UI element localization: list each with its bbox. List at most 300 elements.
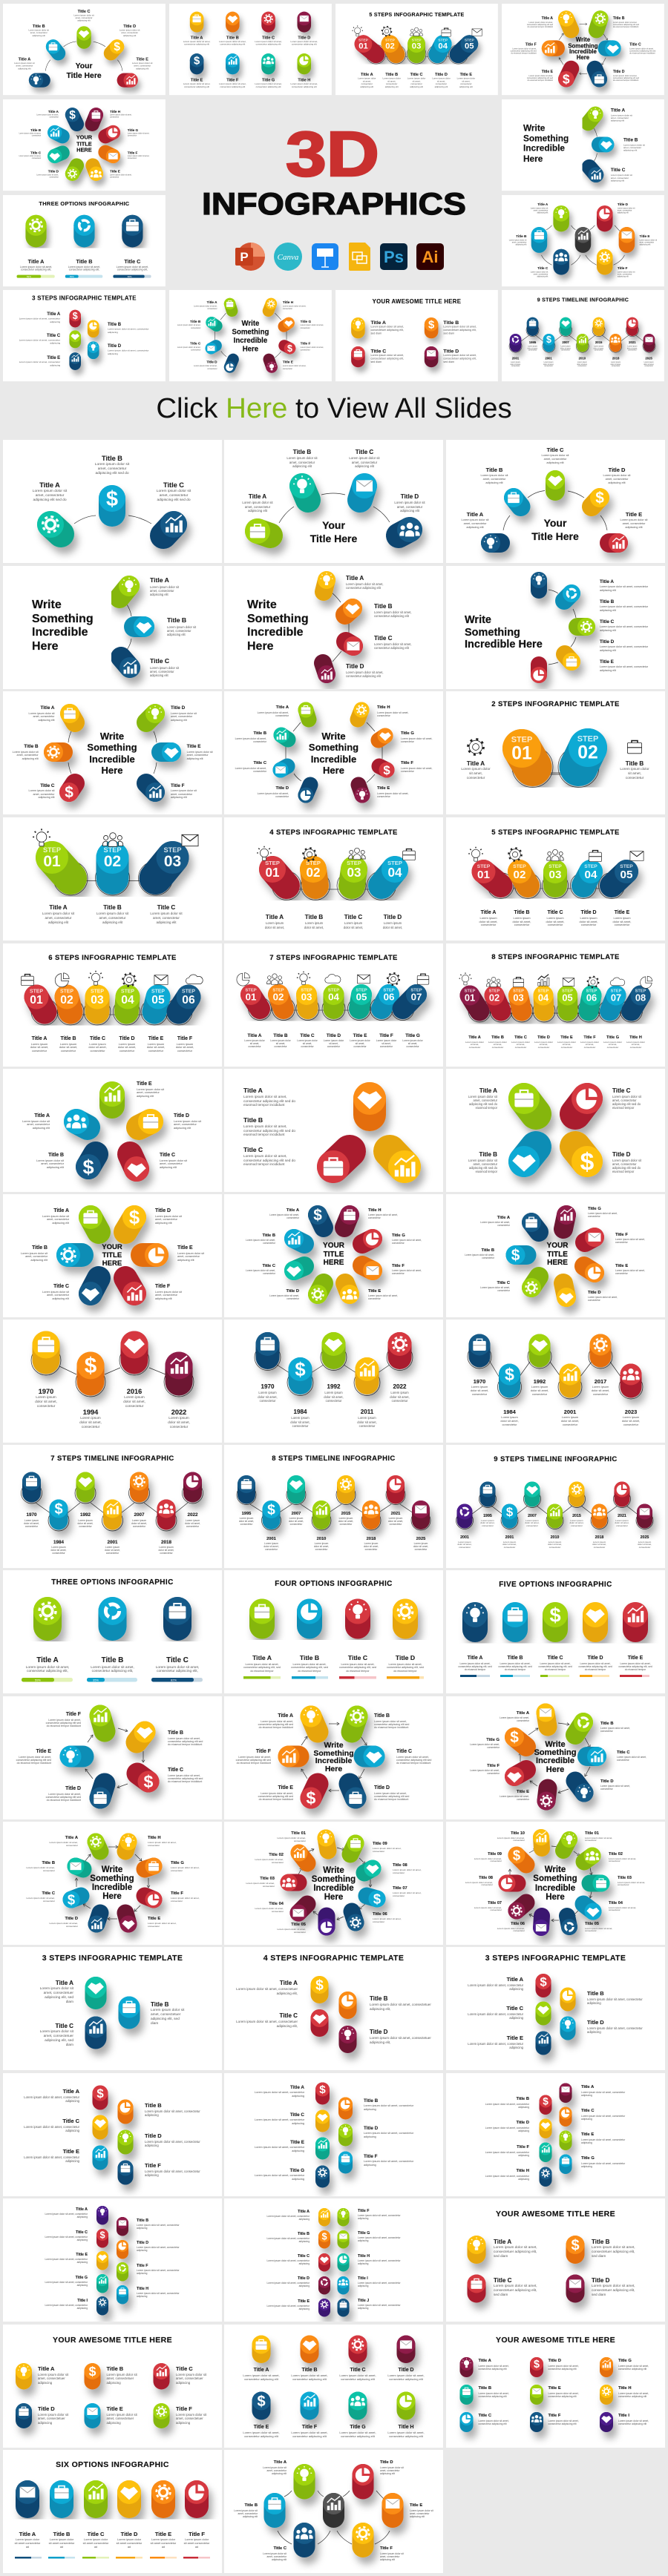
text: Title G xyxy=(618,2359,655,2371)
big title xyxy=(465,614,543,650)
pill: pie xyxy=(531,665,547,683)
pill: gear xyxy=(600,2385,613,2398)
text: Title D: Title D xyxy=(399,2368,413,2373)
pill: cycle xyxy=(98,1597,126,1627)
text: Title D xyxy=(588,1291,623,1302)
text: Title E: Lorem ipsum dolor sit amet, consectetur adipiscing elit xyxy=(548,2392,579,2398)
pill: cycle xyxy=(561,1916,577,1935)
text: Title C xyxy=(263,2254,310,2265)
text: Title A: Title A xyxy=(53,1208,69,1213)
bars xyxy=(460,1675,649,1677)
text: Title F: Lorem ipsum dolor sit amet, consectetur adipiscing elit xyxy=(291,2431,328,2438)
text: 2001 xyxy=(456,1535,474,1549)
panel: write something four pills xyxy=(224,566,443,688)
pill: pie xyxy=(572,1083,603,1114)
text: Title 08: Title 08 xyxy=(393,1863,407,1868)
text: Title A: Lorem ipsum dolor sit amet, consectetur adipiscing elit xyxy=(478,2365,509,2371)
text: 1984: 1984 xyxy=(503,1409,516,1415)
pill: dollar xyxy=(263,1501,281,1521)
thumbnail: eight pill grid: Title C xyxy=(262,35,275,40)
text: Title E: Lorem ipsum dolor sit amet, consectetur xyxy=(368,1294,398,1300)
text: Title F: Title F xyxy=(583,1035,596,1040)
text: 1970 xyxy=(22,1512,41,1528)
icon: pie outline xyxy=(55,973,69,987)
text: 2007: Lorem ipsum dolor sit amet, consectetur xyxy=(289,1517,304,1526)
pill: chart xyxy=(278,1746,300,1767)
pill: briefcase xyxy=(119,1997,140,2018)
text: Title A xyxy=(478,2359,515,2371)
icon: gear outline xyxy=(387,973,399,985)
text: Title E: Lorem ipsum dolor sit amet, consectetur adipiscing xyxy=(255,2146,304,2152)
text: Title A: Lorem ipsum dolor sit amet, consectetur adipiscing elit sed do eiusmod tempor xyxy=(468,1095,497,1110)
text: Title C: Title C xyxy=(547,447,563,453)
text: Title 06 xyxy=(373,1912,408,1924)
text: 2001 xyxy=(262,1537,281,1552)
text: Title B: Title B xyxy=(486,467,502,473)
text: Title A xyxy=(465,1035,484,1050)
icon: bulb outline xyxy=(297,972,310,985)
center title: Write xyxy=(323,1866,344,1875)
text: Title A xyxy=(600,579,648,592)
thumbnail: write something three pills: Title B xyxy=(623,137,638,142)
pill: pie xyxy=(297,1599,322,1626)
text: Title C xyxy=(150,657,180,677)
text: Title 01 xyxy=(270,1831,306,1843)
text: Title D: Lorem ipsum dolor sit amet, consectetur xyxy=(269,1294,299,1300)
text: Title A: Lorem ipsum dolor sit amet, consectetur adipiscing elit xyxy=(346,582,384,590)
thumbnail: your title here radial: Lorem ipsum dolor sit amet, consectetur xyxy=(110,174,132,178)
text: Title C: Lorem ipsum dolor sit amet, consectetur adipiscing elit xyxy=(29,789,55,799)
text: Title A xyxy=(477,909,500,927)
text: 2001: Lorem ipsum dolor sit amet, consectetur xyxy=(458,1541,471,1549)
panel: 5 steps xyxy=(446,817,665,941)
thumbnail: your title here: Title B xyxy=(33,24,45,28)
pill: step 02: STEP xyxy=(577,735,598,744)
text: Title C xyxy=(40,1283,69,1301)
text: 2025: 2025 xyxy=(416,1537,425,1541)
thumbnail: write something eight pills: Lorem ipsum dolor sit amet, consectetur xyxy=(283,305,306,309)
pill: chart xyxy=(536,2031,551,2047)
text: Title B: Lorem ipsum dolor sit amet, consectetur adipiscing xyxy=(587,1997,643,2005)
text: Title A: Lorem ipsum dolor sit amet, consectetur adipiscing elit xyxy=(150,585,179,596)
thumbnail: 3 steps five pills: Title C xyxy=(47,332,60,337)
text: Title D xyxy=(42,1917,78,1928)
pill: handshake xyxy=(508,1146,540,1177)
text: Title E xyxy=(610,909,634,927)
pill: chart xyxy=(84,2480,108,2506)
text: Title A: Lorem ipsum dolor sit amet, consectetur adipiscing elit, xyxy=(26,1666,69,1673)
icon: briefcase outline xyxy=(417,974,429,984)
text: Title B: Lorem ipsum dolor sit amet, consectetur adipiscing elit xyxy=(13,751,39,760)
text: Title H: Title H xyxy=(629,1035,642,1040)
text: Title D: Lorem ipsum dolor sit amet, consectetur adipiscing elit xyxy=(380,2466,404,2475)
text: Title D: Lorem ipsum dolor sit amet, consectetuer adipiscing elit, xyxy=(370,2036,431,2044)
pill: step 03: 03 xyxy=(91,994,104,1007)
text: Title C: Title C xyxy=(600,619,614,625)
text: Title A xyxy=(150,576,180,596)
text: Title C xyxy=(231,761,266,773)
text: Title D xyxy=(534,1035,553,1050)
text: Title D: Lorem ipsum dolor sit amet, xyxy=(383,921,402,929)
text: Title D: Title D xyxy=(65,1917,78,1921)
center title: Incredible xyxy=(311,754,356,764)
panel: three large pills xyxy=(224,1069,443,1191)
text: Title D xyxy=(38,2405,71,2425)
pill: step 01 xyxy=(472,860,500,886)
pill: bulb xyxy=(355,785,370,803)
pill: chart xyxy=(96,2274,108,2287)
text: Title F: Lorem ipsum dolor sit amet, consectetur adipiscing elit sed do eiusmod tempor incididunt xyxy=(236,1756,271,1765)
text: Title H: Title H xyxy=(137,2287,148,2291)
text: Title C: Title C xyxy=(497,1281,510,1285)
text: Title F: Lorem ipsum dolor sit amet, consectetur xyxy=(392,1269,422,1275)
thumbnail: your title here: Lorem ipsum dolor sit amet, consectetur adipiscing elit xyxy=(132,62,152,70)
pill: step 03: 03 xyxy=(513,992,524,1003)
text: Title D: Title D xyxy=(364,2126,378,2131)
text: Title 06: Lorem ipsum dolor sit amet, consectetur xyxy=(497,1927,525,1932)
pill: briefcase xyxy=(468,2274,485,2293)
panel: your title seven petals xyxy=(446,1194,665,1317)
text: 2001 xyxy=(103,1540,122,1555)
pill: handshake xyxy=(310,2009,328,2028)
pill: mail xyxy=(67,1857,85,1875)
pill: briefcase xyxy=(508,1083,540,1114)
pill: chart xyxy=(273,727,289,743)
text: Title E: Title E xyxy=(63,2148,79,2155)
pill: mail xyxy=(85,2403,101,2420)
text: Title B xyxy=(240,1233,275,1245)
text: Title D: Title D xyxy=(119,1036,134,1041)
big title: Something xyxy=(32,613,94,625)
heading: 3 STEPS INFOGRAPHIC TEMPLATE xyxy=(42,1954,183,1963)
pill: chart xyxy=(315,2138,330,2152)
text: Title F xyxy=(401,761,436,773)
text: Title E: Title E xyxy=(377,786,390,791)
pill: mail xyxy=(536,1703,555,1727)
thumbnail: your title here: Title C xyxy=(78,9,90,13)
text: Title A: Title A xyxy=(298,2210,310,2214)
text: Title F xyxy=(176,2405,209,2425)
text: Title A: Lorem ipsum dolor sit amet, consectetur adipiscing elit sed do eiusmod tempor incididunt xyxy=(243,1096,295,1107)
pill: step 05 xyxy=(557,985,577,1011)
text: Title 04: Lorem ipsum dolor sit amet, consectetur xyxy=(609,1906,636,1911)
heading: 4 STEPS INFOGRAPHIC TEMPLATE xyxy=(269,829,398,837)
thumbnail: three options: THREE OPTIONS INFOGRAPHIC xyxy=(39,201,129,207)
thumbnail: 9 steps timeline: 2018 xyxy=(612,357,619,360)
heading: YOUR AWESOME TITLE HERE xyxy=(53,2336,172,2345)
text: 2022: Lorem ipsum dolor sit amet, consectetur xyxy=(390,1391,410,1403)
text: Title 07 xyxy=(393,1886,428,1898)
text: Title D: Title D xyxy=(401,493,419,500)
center title xyxy=(511,1741,600,1774)
text: 2017: 2017 xyxy=(595,1378,606,1385)
text: Title F: Title F xyxy=(171,1891,183,1896)
text: Title D: Lorem ipsum dolor sit amet, consectetur adipiscing elit sed do eiusmod tempor incididunt xyxy=(374,1792,409,1801)
center title: HERE xyxy=(102,1259,122,1267)
pill: dollar xyxy=(572,1146,603,1177)
text: Title C xyxy=(511,1035,530,1050)
text: Title E: Lorem ipsum dolor sit amet, consectetur xyxy=(612,916,632,926)
text: Title F: Lorem ipsum dolor sit amet, consectetur xyxy=(171,1897,200,1903)
text: Title A: Lorem ipsum dolor sit amet, consectetur adipiscing elit xyxy=(29,712,55,722)
pill: step 02: STEP xyxy=(60,989,73,995)
text: 1995: Lorem ipsum dolor sit amet, consectetur xyxy=(239,1517,254,1526)
pill: step 01: 01 xyxy=(246,992,257,1003)
thumbnail: your title here radial: Lorem ipsum dolor sit amet, consectetur xyxy=(19,133,41,137)
text: 2016 xyxy=(121,1387,148,1409)
text: Title F: Title F xyxy=(176,2405,192,2412)
text: 2007 xyxy=(130,1512,148,1528)
text: Title E xyxy=(107,2405,140,2425)
text: Title E: Lorem ipsum dolor sit amet consectetur ad xyxy=(151,2537,176,2549)
thumbnail: 5 steps: Title D xyxy=(435,72,448,77)
text: Title B: Title B xyxy=(305,914,323,920)
text: Title B: Lorem ipsum dolor sit amet, consectetuer adipiscing xyxy=(107,2373,137,2385)
pill: chart xyxy=(88,1913,105,1933)
text: Title B: Title B xyxy=(600,599,614,605)
pill: bulb xyxy=(462,1602,488,1630)
pill: pie xyxy=(352,2464,374,2488)
text: Title 02: Title 02 xyxy=(609,1852,623,1857)
panel: 4 steps vertical xyxy=(224,1947,443,2069)
text: 1992: 1992 xyxy=(534,1378,546,1385)
center title: TITLE xyxy=(102,1251,122,1259)
text: Title C: Title C xyxy=(344,914,362,920)
pill: step 07: 07 xyxy=(411,992,422,1003)
thumbnail: 9 steps timeline: 9 STEPS TIMELINE INFOGRAPHIC xyxy=(537,297,629,303)
text: Title A: Lorem ipsum dolor sit amet, consectetur adipiscing elit xyxy=(600,585,648,592)
center title: Something xyxy=(312,1875,356,1884)
text: Title C: Lorem ipsum dolor sit amet, consectetur xyxy=(546,916,565,926)
text: Title B xyxy=(88,1656,137,1674)
pill: pie xyxy=(396,2391,416,2411)
text: Title A: Title A xyxy=(600,579,614,584)
pill: step 01 xyxy=(460,985,479,1011)
text: Title C: Lorem ipsum dolor sit amet, consectetuer adipiscing xyxy=(176,2373,206,2385)
thumbnail: eight pill grid: Lorem ipsum dolor sit amet, consectetur adipiscing elit xyxy=(219,82,246,88)
text: Title D xyxy=(387,2367,425,2381)
pill: step 01: 01 xyxy=(465,992,475,1003)
text: 2021: 2021 xyxy=(391,1512,400,1516)
text: Title B: Lorem ipsum dolor sit amet, xyxy=(304,921,324,929)
text: Title D: Lorem ipsum dolor sit amet, consectetur adipiscing elit, sed do eiusmod tempor xyxy=(387,1663,424,1673)
text: Title 08 xyxy=(459,1876,493,1887)
text: Title B: Title B xyxy=(587,1990,604,1997)
pill: gear xyxy=(130,1472,148,1493)
text: Title C: Title C xyxy=(56,2023,73,2029)
text: Title E: Lorem ipsum dolor sit amet, consectetur xyxy=(557,1041,576,1049)
pill: step 01: STEP xyxy=(265,860,280,866)
text: Title A xyxy=(474,1216,510,1228)
pill: cycle xyxy=(457,1504,472,1521)
text: Title 09 xyxy=(468,1852,502,1863)
thumbnail: write something eight pills xyxy=(169,289,332,381)
thumbnail: hub: Title B xyxy=(516,234,526,238)
text: Title I xyxy=(358,2276,405,2287)
pill: pie xyxy=(460,2412,474,2425)
text: Title H: Lorem ipsum dolor sit amet, consectetur adipiscing elit xyxy=(387,2431,425,2438)
thumbnail: 9 steps timeline: Lorem ipsum dolor sit amet, consectetur xyxy=(644,360,654,367)
text: Title A: Lorem ipsum dolor sit amet, consectetur xyxy=(269,1213,299,1219)
text: Title B xyxy=(137,2218,183,2230)
text: Title A xyxy=(494,1711,529,1723)
text: 2022: Lorem ipsum dolor sit amet, consectetur xyxy=(168,1417,190,1429)
text: Title A: Title A xyxy=(278,1713,293,1719)
pill: people xyxy=(157,1500,175,1521)
text: Title D xyxy=(385,1654,425,1673)
thumbnail: six arrows cycle: Lorem ipsum dolor sit amet, consectetur adipiscing elit sed do eiusmod tempor incididunt xyxy=(613,22,639,28)
thumbnail: your title here: Lorem ipsum dolor sit amet, consectetur adipiscing elit xyxy=(73,13,94,22)
text: Title D: Lorem ipsum dolor sit amet, consectetur adipiscing elit xyxy=(171,712,197,722)
panel: ten pills two columns xyxy=(224,2198,443,2322)
pill: step 01: STEP xyxy=(43,846,61,854)
text: Title 07 xyxy=(468,1901,502,1912)
text: Title D: Lorem ipsum dolor sit amet, consectetur adipiscing xyxy=(145,2140,200,2147)
text: Title C xyxy=(338,1654,378,1673)
text: 2010: 2010 xyxy=(551,1535,559,1540)
thumbnail: six arrows cycle: Title D xyxy=(613,70,624,74)
text: Title B xyxy=(480,467,508,484)
pill: mail xyxy=(412,1501,430,1521)
text: Title B: Title B xyxy=(491,1035,504,1040)
pill: dollar xyxy=(252,2391,270,2411)
text: Title A: Lorem ipsum dolor sit amet, consectetur xyxy=(465,1041,484,1049)
text: Title B: Lorem ipsum dolor sit amet, consectetur xyxy=(26,1866,55,1872)
thumbnail: write something eight pills: Lorem ipsum dolor sit amet, consectetur xyxy=(301,324,324,329)
text: Title H: Lorem ipsum dolor sit amet, consectetur adipiscing elit xyxy=(618,2392,649,2398)
pill: step 04: STEP xyxy=(538,989,549,994)
text: Title A: Title A xyxy=(274,2460,286,2465)
text: Title E xyxy=(620,511,648,529)
text: 1970 xyxy=(255,1383,280,1403)
text: Title D xyxy=(116,1035,138,1053)
text: Title B: Lorem ipsum dolor sit amet, consectetur adipiscing elit xyxy=(36,1159,64,1169)
pill: bulb xyxy=(120,1834,137,1851)
pill: heart xyxy=(528,1334,551,1357)
thumbnail: three options: Lorem ipsum dolor sit amet, consectetur adipiscing elit, xyxy=(117,266,148,271)
thumbnail: your title here: Title E xyxy=(136,56,148,62)
pill: step 02: 02 xyxy=(577,742,598,762)
pill: dollar xyxy=(77,1351,104,1382)
text: Title D xyxy=(600,1779,636,1791)
text: Title A: Title A xyxy=(41,705,55,711)
text: Title C: Title C xyxy=(548,910,563,915)
text: Title D xyxy=(587,2019,648,2034)
icon: people outline xyxy=(547,849,563,861)
center title xyxy=(310,519,357,544)
pill: gear xyxy=(539,2167,552,2181)
text: Title A: Lorem ipsum dolor sit amet, consectetuer adipiscing elit, xyxy=(236,1987,298,1995)
pill: briefcase xyxy=(79,1205,102,1232)
pill: chart xyxy=(300,2391,319,2411)
text: Title A: Title A xyxy=(76,2207,88,2212)
pill: heart xyxy=(546,470,565,491)
center title: Write xyxy=(321,730,346,742)
pill: step 04: 04 xyxy=(328,992,339,1003)
text: Title G: Lorem ipsum dolor sit amet, consectetur xyxy=(392,1239,422,1245)
text: Title A xyxy=(263,2210,310,2221)
big title: Write xyxy=(32,599,62,611)
text: Title B: Lorem ipsum dolor sit amet, consectetur adipiscing elit, sed do eiusmod tempor xyxy=(291,1663,328,1673)
text: Title B xyxy=(151,2001,188,2026)
text: Title D xyxy=(45,1785,81,1802)
text: Title G xyxy=(392,1233,428,1245)
pill: bulb xyxy=(560,2130,572,2144)
text: Title E xyxy=(462,2035,523,2049)
text: Title A xyxy=(460,760,491,781)
text: Title C: Title C xyxy=(42,1891,55,1896)
text: Title H: Title H xyxy=(517,2169,529,2173)
pill: step 06: 06 xyxy=(182,994,195,1007)
text: Title D: Title D xyxy=(600,1779,613,1784)
pill: step 02 xyxy=(96,841,129,878)
text: Title C: Title C xyxy=(40,783,55,788)
text: Title I: Lorem ipsum dolor sit amet, consectetur adipiscing elit xyxy=(618,2419,649,2425)
text: Title 09 xyxy=(373,1842,408,1854)
text: Title E xyxy=(494,1790,529,1802)
thumbnail: write something three pills: Here xyxy=(523,154,543,164)
pill: briefcase xyxy=(264,2493,285,2517)
text: 2021 xyxy=(613,1514,631,1528)
pill: bulb xyxy=(574,1781,594,1802)
thumbnail: your title here: Lorem ipsum dolor sit amet, consectetur adipiscing elit xyxy=(119,28,140,36)
text: Title A xyxy=(36,1980,73,2005)
icon: briefcase outline xyxy=(589,851,601,862)
text: Title 07: Title 07 xyxy=(488,1901,502,1905)
text: Title A: Title A xyxy=(346,575,364,582)
text: Title A: Lorem ipsum dolor sit amet, consectetur adipiscing elit xyxy=(243,2374,280,2381)
text: Title H: Title H xyxy=(148,1836,160,1840)
text: Title C: Lorem ipsum dolor sit amet, consectetur xyxy=(617,1756,646,1762)
pill: dollar xyxy=(508,1847,526,1865)
text: Title C: Title C xyxy=(53,1284,69,1289)
heading: 3 STEPS INFOGRAPHIC TEMPLATE xyxy=(485,1954,626,1963)
text: Title D: Lorem ipsum dolor sit amet, consectetur adipiscing xyxy=(137,2246,180,2252)
bars xyxy=(243,1676,424,1679)
text: Title B: Lorem ipsum dolor sit amet, consectetuer adipiscing elit, sed diam xyxy=(592,2246,635,2259)
text: Title F xyxy=(392,1264,428,1276)
text: Title B: Lorem ipsum dolor sit amet, consectetur adipiscing elit sed do eiusmod tempor incididunt xyxy=(168,1737,203,1746)
text: Title A xyxy=(261,2460,286,2475)
text: Title B: Lorem ipsum dolor sit amet, consectetur adipiscing xyxy=(137,2224,180,2230)
text: Title G: Lorem ipsum dolor sit amet, consectetur xyxy=(401,737,432,743)
text: Title C: Lorem ipsum dolor sit amet, consectetur xyxy=(26,1897,55,1903)
text: Title C xyxy=(19,1891,55,1903)
text: Title 02: Lorem ipsum dolor sit amet, consectetur xyxy=(609,1857,636,1862)
pill: people xyxy=(620,1363,641,1387)
text: Title C: Title C xyxy=(76,2230,88,2235)
pill: pie xyxy=(362,1229,382,1248)
thumbnail: your title here radial: Title H xyxy=(110,110,120,113)
panel: nine zigzag pills xyxy=(3,2198,222,2322)
text: Title D: Title D xyxy=(298,2276,310,2281)
text: Title C: Lorem ipsum dolor sit amet, consectetuer adipiscing elit, sed diam xyxy=(40,2030,73,2047)
text: Title E: Title E xyxy=(187,744,200,749)
thumbnail: 5 steps xyxy=(335,4,498,95)
text: 2016: Lorem ipsum dolor sit amet, consectetur xyxy=(123,1396,145,1409)
center title: Incredible xyxy=(536,1756,574,1765)
text: Title H xyxy=(626,1035,645,1050)
center title xyxy=(68,1865,157,1900)
text: Title D: Lorem ipsum dolor sit amet, consectetur xyxy=(534,1041,553,1049)
text: Title F: Title F xyxy=(379,1033,393,1038)
pill: bulb xyxy=(119,576,140,598)
text: Title 09: Title 09 xyxy=(373,1842,387,1846)
thumbnail: eight pill grid: Lorem ipsum dolor sit amet, consectetur adipiscing elit xyxy=(291,82,318,88)
text: 2001: Lorem ipsum dolor sit amet, consectetur xyxy=(561,1415,579,1426)
text: Title 03: Lorem ipsum dolor sit amet, consectetur xyxy=(618,1881,645,1886)
text: Title B: Title B xyxy=(102,1656,123,1664)
